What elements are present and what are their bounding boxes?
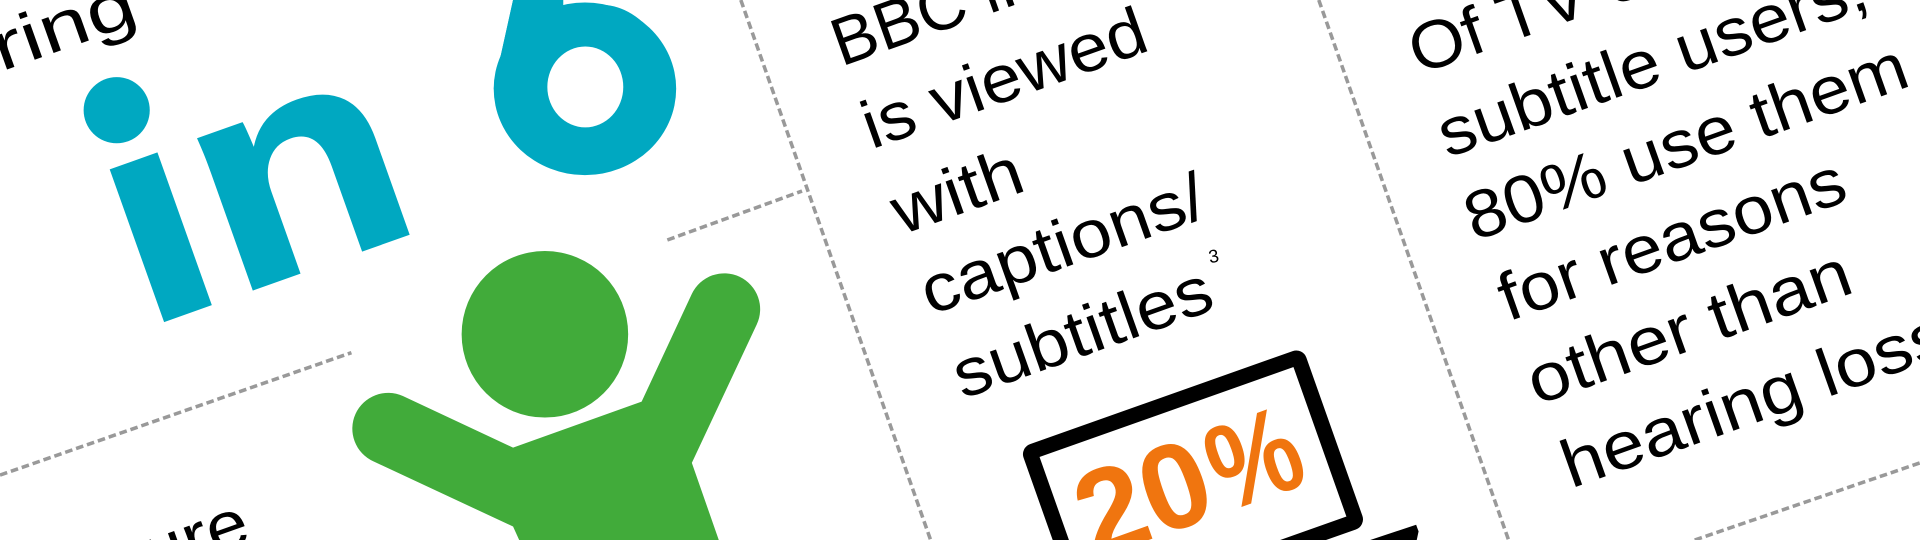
text block: BBC iPlayer captions statistic — [821, 0, 1222, 413]
text block: TV subtitle users statistic: for reasons — [1488, 143, 1856, 336]
text block: TV subtitle users statistic: 80% use them — [1454, 29, 1918, 255]
icon: laptop with 20% on screen: % — [1188, 379, 1320, 537]
icon: green person with raised arms — [352, 251, 760, 540]
big number: 6 — [494, 0, 676, 176]
text block: BBC iPlayer captions statistic: captions/ — [910, 159, 1216, 330]
text block: BBC iPlayer captions statistic: is viewed — [851, 0, 1157, 164]
icon: laptop with 20% on screen — [1030, 357, 1419, 540]
text block: BBC iPlayer captions statistic: with — [880, 133, 1033, 250]
text block: BBC iPlayer captions statistic: 3 — [1207, 245, 1221, 267]
text block: BBC iPlayer captions statistic: subtitles — [942, 252, 1222, 413]
text block: TV subtitle users statistic — [1398, 0, 1920, 503]
text block: TV subtitle users statistic: hearing loss — [1551, 296, 1920, 503]
text block: TV subtitle users statistic: other than — [1517, 235, 1861, 419]
